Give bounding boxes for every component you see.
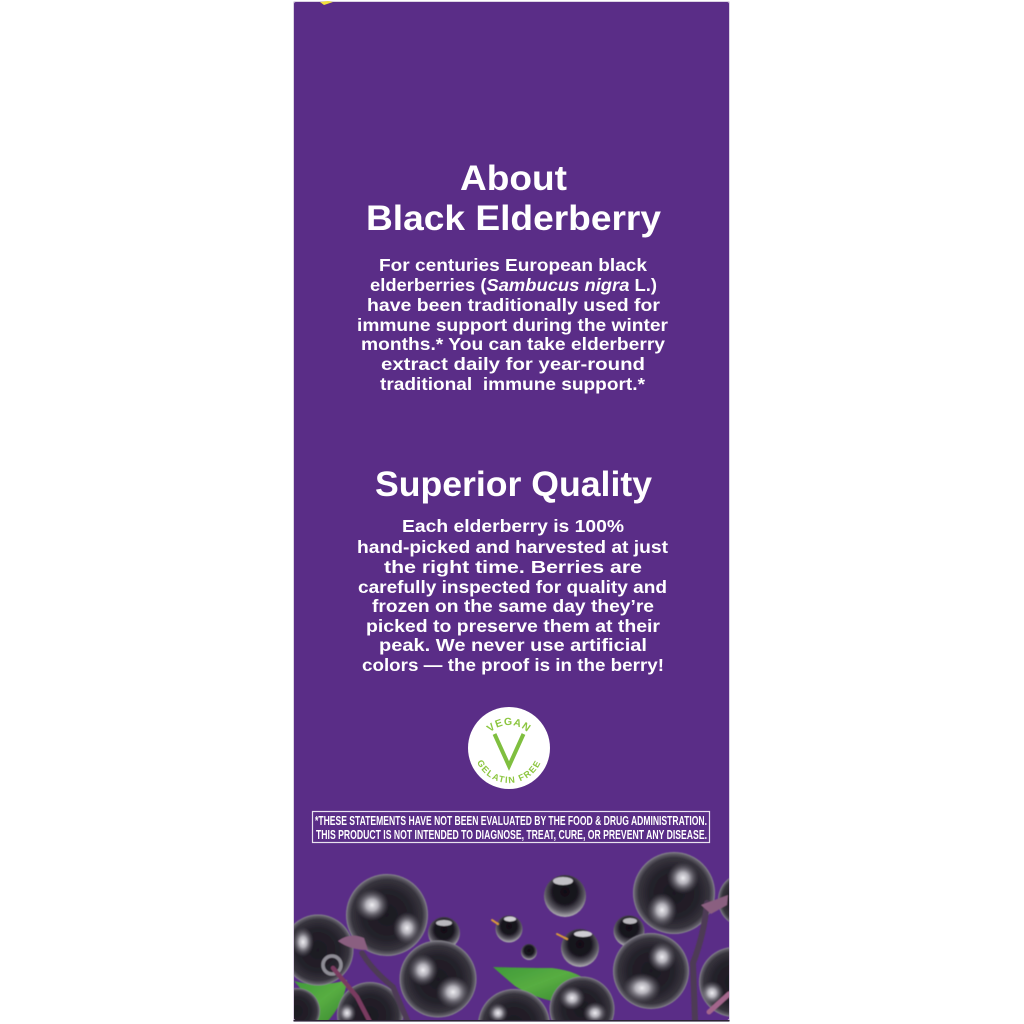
callout: FDA disclaimer box: THIS PRODUCT IS NOT INTENDED TO DIAGNOSE, TREAT, CURE, OR PREVENT ANY DISEASE. xyxy=(316,828,707,842)
berries xyxy=(294,852,729,1020)
icon: vegan gelatin free badge: GELATIN FREE xyxy=(478,760,540,784)
text block: about paragraph: For centuries European black xyxy=(379,255,647,275)
panel: purple card xyxy=(293,1,730,1022)
text block: about paragraph: months.* You can take elderberry xyxy=(361,334,665,354)
text block: quality paragraph: the right time. Berries are xyxy=(384,557,642,577)
text block: about paragraph xyxy=(357,255,668,394)
text block: quality paragraph: carefully inspected for quality and xyxy=(358,577,667,597)
text block: quality paragraph: frozen on the same day they’re xyxy=(372,596,654,616)
text block: about paragraph: elderberries ( Sambucus nigra L.) xyxy=(370,275,657,295)
stems and stalks xyxy=(333,895,729,1022)
heading: About Black Elderberry: About xyxy=(460,159,567,198)
text block: quality paragraph: picked to preserve them at their xyxy=(366,616,660,636)
leaf: left xyxy=(294,980,347,1022)
icon: vegan gelatin free badge xyxy=(468,707,550,789)
callout: FDA disclaimer box: *THESE STATEMENTS HAVE NOT BEEN EVALUATED BY THE FOOD & DRUG ADMINISTRATION. xyxy=(315,814,707,828)
text block: about paragraph: immune support during the winter xyxy=(357,315,668,335)
heading: Superior Quality: Superior Quality xyxy=(375,465,653,504)
text block: about paragraph: traditional immune support.* xyxy=(380,374,645,394)
text block: quality paragraph: hand-picked and harvested at just xyxy=(357,537,668,557)
text block: quality paragraph: colors — the proof is in the berry! xyxy=(362,655,664,675)
icon: vegan gelatin free badge: VEGAN xyxy=(486,718,531,732)
leaf: center xyxy=(493,967,582,1001)
text block: quality paragraph: Each elderberry is 100% xyxy=(402,516,624,536)
heading: About Black Elderberry xyxy=(366,159,662,238)
text block: about paragraph: have been traditionally used for xyxy=(367,295,660,315)
heading: About Black Elderberry: Black Elderberry xyxy=(366,199,662,238)
text block: quality paragraph xyxy=(357,516,668,675)
illustration: elderberries and leaves xyxy=(294,852,729,1020)
callout: FDA disclaimer box xyxy=(312,812,710,842)
text block: about paragraph: extract daily for year-round xyxy=(381,354,645,374)
text block: quality paragraph: peak. We never use artificial xyxy=(379,635,647,655)
